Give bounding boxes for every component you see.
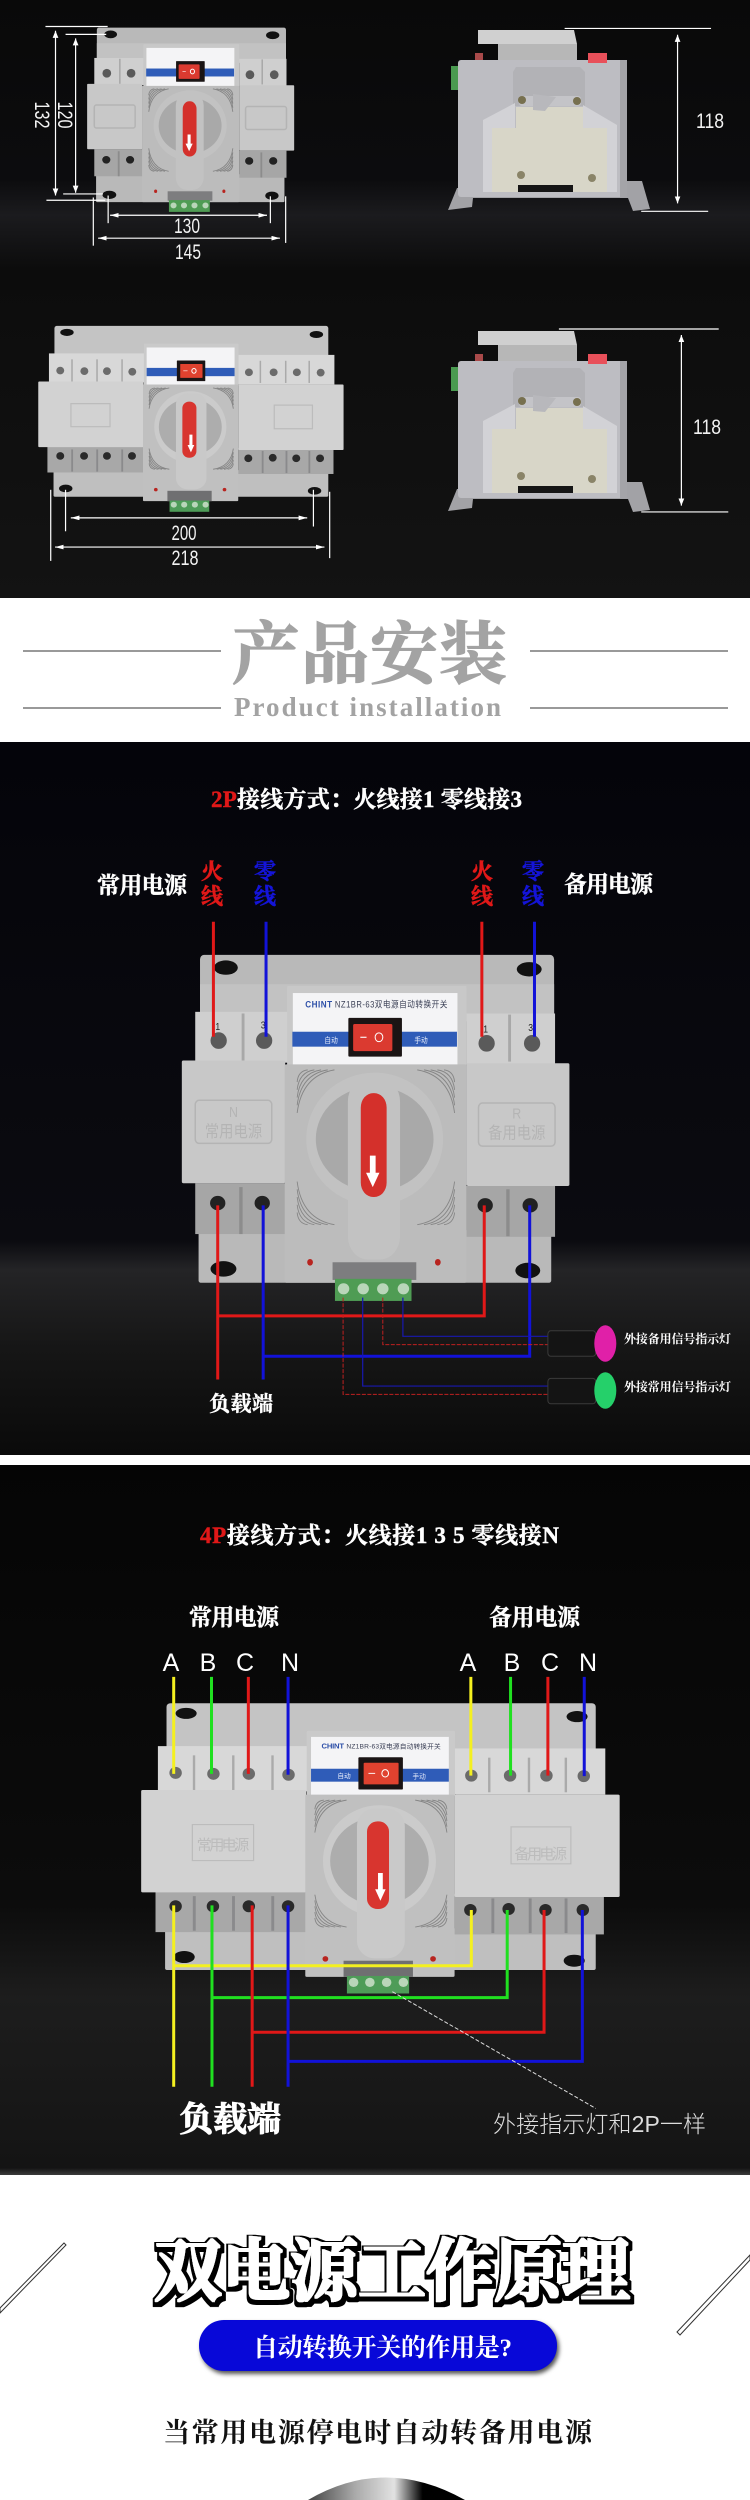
2P side view [448,30,650,211]
label 118 upper: 118 [696,110,724,133]
wires [213,922,548,1394]
pill: question: 自动转换开关的作用是? [253,2333,512,2362]
heading: product installation: Product installation [234,692,501,722]
switch brand label: NZ1BR-63双电源自动转换开关 [346,1742,441,1750]
switch brand label: NZ1BR-63双电源自动转换开关 [335,999,447,1010]
phase letters: B [200,1649,216,1677]
title working principle: 双电源工作原理 [154,2234,630,2310]
label load end: 负载端 [179,2101,281,2139]
label backup power: 备用电源 [489,1605,582,1630]
label backup lamp: 外接备用信号指示灯 [624,1331,731,1346]
label 145: 145 [175,241,201,264]
switch brand label: 手动 [412,1772,426,1780]
label neutral wire right: 零 [522,859,544,884]
phase letters: A [163,1649,180,1677]
switch brand label [197,1742,567,1863]
panel: working principle [0,2234,750,2500]
switch brand label: CHINT [305,999,333,1010]
switch brand label: 自动 [324,1035,338,1045]
panel: 4P wiring [0,1465,750,2175]
label neutral wire left: 线 [254,884,276,909]
sphere [308,2478,465,2500]
indicator lamps [548,1325,616,1409]
switch brand label: 备用电源 [514,1846,567,1863]
4P side view [448,331,650,512]
phase letters: B [504,1649,520,1677]
switch brand label: R [512,1106,521,1122]
label live wire left: 火 [201,859,223,884]
label common power: 常用电源 [97,873,189,898]
phase letters: A [460,1649,477,1677]
phase letters: N [579,1649,597,1677]
heading: product installation: 产品安装 [232,617,507,693]
switch brand label [205,999,545,1143]
label neutral wire right: 线 [522,884,544,909]
decorative slashes [0,2243,750,2335]
switch brand label: 备用电源 [488,1123,545,1143]
label common power: 常用电源 [189,1605,281,1630]
label live wire right: 线 [471,884,493,909]
panel: dimensions [0,0,750,598]
2P front view [87,28,294,212]
label common lamp: 外接常用信号指示灯 [624,1379,731,1394]
switch brand label: 常用电源 [197,1837,249,1854]
switch brand label: N [229,1104,238,1120]
title 2P wiring: 2P接线方式：火线接1 零线接3 [211,787,522,812]
label 120: 120 [53,102,76,128]
label 200: 200 [172,522,196,545]
phase letters [163,1649,597,1677]
note external lamp: 外接指示灯和2P一样 [493,2111,706,2137]
label neutral wire left: 零 [254,859,276,884]
wires [174,1677,596,2108]
dimension lines [45,26,728,561]
panel: 2P wiring [0,742,750,1455]
4P front view [38,326,344,512]
title 4P wiring: 4P接线方式：火线接1 3 5 零线接N [200,1523,559,1548]
label 218: 218 [172,547,198,570]
label live wire right: 火 [471,859,493,884]
switch brand label: 1 [215,1022,220,1032]
heading: product installation [23,617,728,722]
switch brand label: 自动 [337,1771,351,1780]
pill: question [199,2320,557,2371]
switch brand label: 常用电源 [205,1122,262,1141]
phase letters: N [281,1649,299,1677]
2P switch [182,955,569,1301]
phase letters: C [541,1649,559,1677]
label 130: 130 [174,215,200,238]
label live wire left: 线 [201,884,223,909]
4P switch [141,1703,620,1993]
switch brand label: 手动 [414,1035,428,1045]
label 118 lower: 118 [693,416,721,439]
switch brand label: 3 [261,1020,266,1031]
switch brand label: CHINT [322,1742,344,1750]
answer text: 当常用电源停电时自动转备用电源 [163,2418,594,2448]
switch brand label: 1 [483,1024,488,1034]
label load end: 负载端 [209,1392,273,1416]
label 132: 132 [30,102,53,128]
label backup power: 备用电源 [564,872,655,897]
phase letters: C [236,1649,254,1677]
switch brand label: 3 [528,1023,533,1033]
